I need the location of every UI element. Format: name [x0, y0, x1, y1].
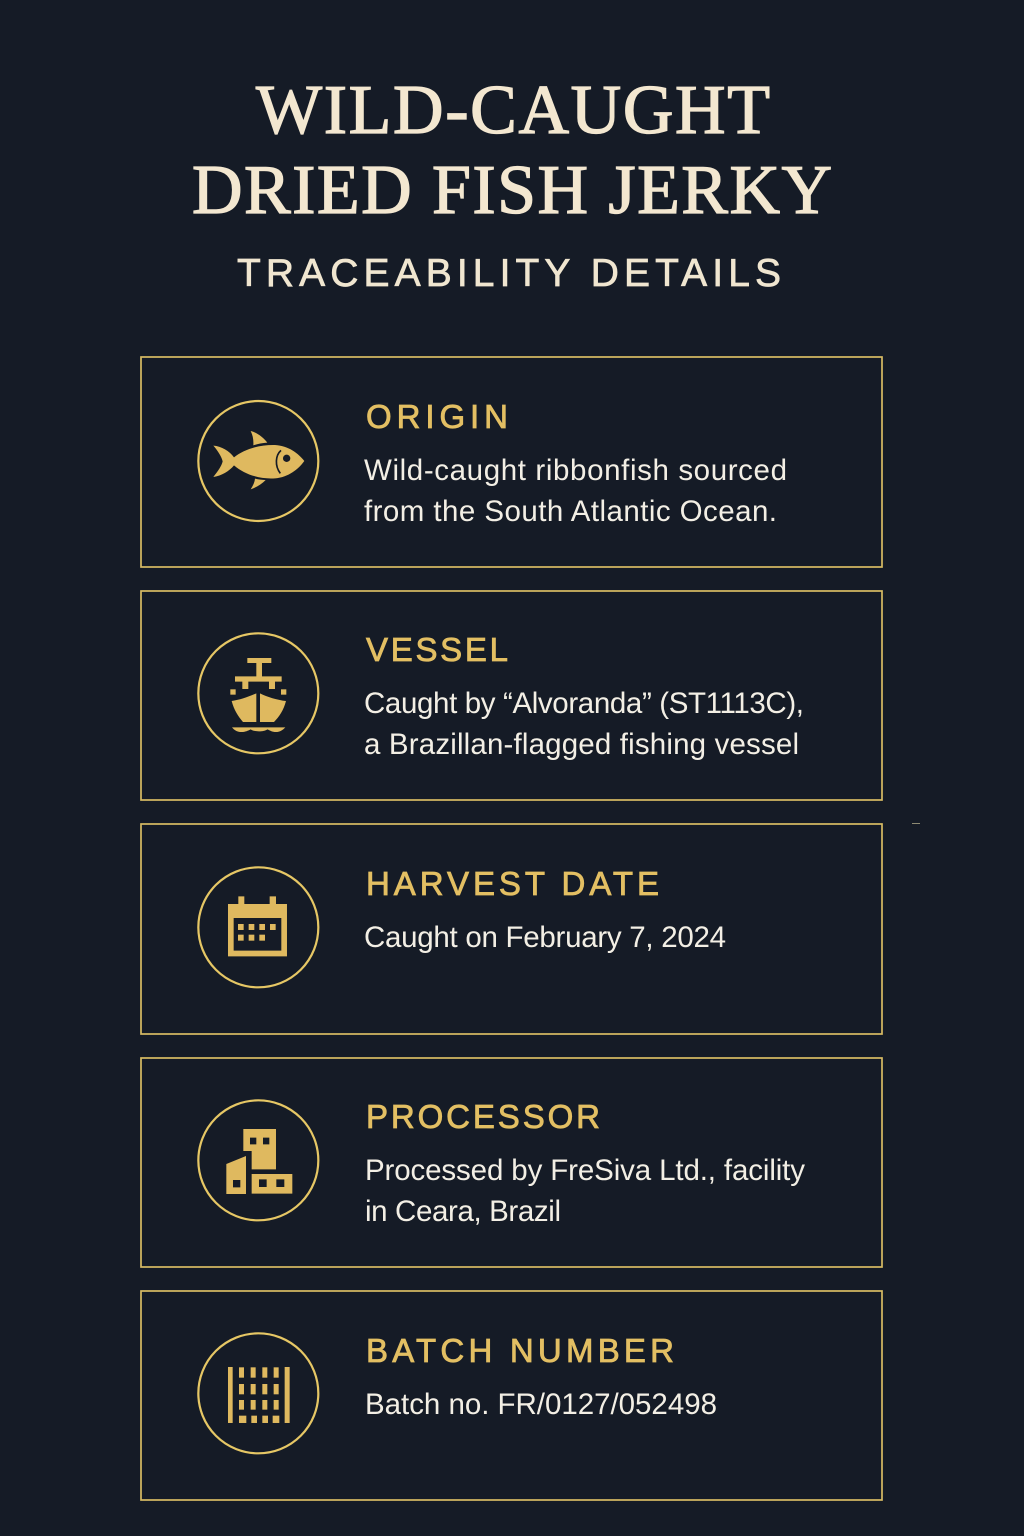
text: harvest date details: Caught on February 7, 2024	[364, 921, 726, 954]
title	[192, 72, 832, 229]
heading: origin: ORIGIN	[366, 398, 508, 435]
heading: vessel: VESSEL	[366, 631, 508, 668]
panel: batch number	[141, 1291, 882, 1500]
title: DRIED FISH JERKY	[192, 152, 832, 229]
heading: batch number: BATCH NUMBER	[366, 1332, 674, 1369]
panel: processor	[141, 1058, 882, 1267]
panel: origin	[141, 357, 882, 567]
icon: ship	[198, 633, 318, 753]
icon: factory buildings	[198, 1100, 318, 1220]
icon: calendar	[198, 867, 318, 987]
heading: processor: PROCESSOR	[366, 1098, 600, 1135]
text: origin details	[364, 454, 787, 528]
icon: barcode grid	[198, 1333, 318, 1453]
text: origin details: from the South Atlantic Ocean.	[364, 495, 777, 528]
text: processor details: Processed by FreSiva Ltd., facility	[365, 1154, 805, 1187]
text: vessel details: Caught by “Alvoranda” (ST1113C),	[364, 687, 804, 720]
text: batch number details: Batch no. FR/0127/052498	[365, 1388, 717, 1421]
text: vessel details	[364, 687, 804, 761]
title: WILD-CAUGHT	[256, 72, 770, 149]
panel: harvest date	[141, 824, 882, 1034]
text: processor details	[365, 1154, 805, 1228]
text: vessel details: a Brazillan-flagged fishing vessel	[364, 728, 799, 761]
subtitle: TRACEABILITY DETAILS	[237, 252, 781, 295]
text: origin details: Wild-caught ribbonfish sourced	[364, 454, 787, 487]
text: processor details: in Ceara, Brazil	[365, 1195, 561, 1228]
icon: fish	[198, 401, 318, 521]
panel: vessel	[141, 591, 882, 800]
heading: harvest date: HARVEST DATE	[366, 865, 659, 902]
